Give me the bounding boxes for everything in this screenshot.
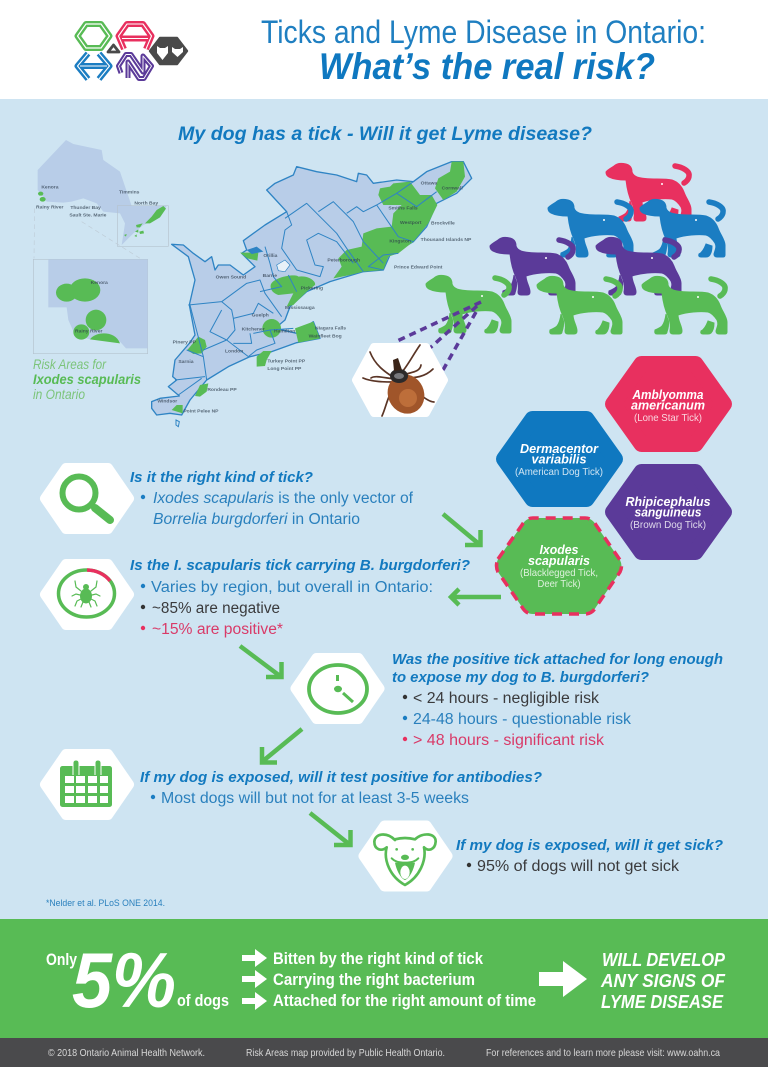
place names: Hamilton <box>274 328 295 334</box>
question text: Is it the right kind of tick? <box>130 470 313 486</box>
step 3: attachment time <box>296 652 723 749</box>
question text: Was the positive tick attached for long enough <box>392 652 723 668</box>
answer text: Ixodes scapularis is the only vector of <box>153 490 414 507</box>
place names: Guelph <box>252 312 269 318</box>
place names: Kitchener <box>242 326 265 332</box>
question text <box>392 652 723 686</box>
place names: Sarnia <box>178 359 194 365</box>
hexagon: Amblyomma americanum <box>613 364 724 444</box>
map: Ontario overview inset: Thunder Bay <box>70 205 101 211</box>
place names: Cornwall <box>442 185 463 191</box>
subheading: My dog has a tick - Will it get Lyme disease? <box>178 124 592 145</box>
question text: If my dog is exposed, will it test positive for antibodies? <box>140 770 542 786</box>
map caption: Ixodes scapularis <box>33 371 141 387</box>
icon: arrow <box>242 970 267 988</box>
flow arrows <box>240 514 501 845</box>
step 1: right kind of tick <box>45 468 414 529</box>
place names: London <box>225 348 243 354</box>
logo hexagon H <box>78 54 110 79</box>
map: northwestern detail inset <box>48 259 148 348</box>
logo: OAHN hexagons <box>78 24 187 79</box>
icon: magnifying glass <box>45 468 129 529</box>
logo hexagon A <box>118 24 152 49</box>
place names: Smiths Falls <box>388 205 418 211</box>
place names: Mississauga <box>285 305 315 311</box>
hexagon: Dermacentor variabilis <box>504 419 615 499</box>
outcome text: WILL DEVELOP <box>602 950 726 970</box>
map credit: Risk Areas map provided by Public Health Ontario. <box>246 1047 445 1059</box>
place names: Windsor <box>157 398 177 404</box>
logo hexagon N <box>118 54 152 78</box>
hexagon: Amblyomma americanum: americanum <box>631 398 705 412</box>
place names: Wainfleet Bog <box>309 334 342 340</box>
hexagon: Amblyomma americanum: (Lone Star Tick) <box>634 412 702 424</box>
place names: Turkey Point PP <box>267 358 306 364</box>
title line 2: What’s the real risk? <box>319 46 655 87</box>
Only 5% of dogs: 5% <box>72 936 176 1024</box>
logo hexagon animals <box>150 38 187 64</box>
arrow: Ixodes to step 2 <box>451 589 501 605</box>
county borders <box>175 182 437 395</box>
icon: calendar <box>45 754 129 815</box>
footnote: *Nelder et al. PLoS ONE 2014. <box>46 898 165 908</box>
answer text: Most dogs will but not for at least 3-5 weeks <box>161 790 469 807</box>
map: Ontario overview inset: Kenora <box>41 184 59 190</box>
header band <box>0 0 768 99</box>
answer list <box>141 579 433 638</box>
answer list <box>403 690 631 749</box>
red dog <box>606 163 691 221</box>
hexagon: Rhipicephalus sanguineus: Rhipicephalus <box>626 494 710 509</box>
purple dog right <box>596 237 681 295</box>
question text: If my dog is exposed, will it get sick? <box>456 838 723 854</box>
hexagon: Ixodes scapularis: Deer Tick) <box>538 578 580 590</box>
answer text: 95% of dogs will not get sick <box>477 858 679 875</box>
tick illustration <box>363 345 434 420</box>
outcome text: ANY SIGNS OF <box>600 971 726 991</box>
blue dog right <box>640 199 725 257</box>
answer text <box>141 490 414 528</box>
place names: Kingston <box>389 238 411 244</box>
arrow: step 2 to step 3 <box>240 646 282 677</box>
arrow: step 3 to step 4 <box>262 729 302 762</box>
place names: Peterborough <box>327 258 360 264</box>
icon: arrow <box>242 992 267 1010</box>
map caption: in Ontario <box>33 386 85 402</box>
place names <box>157 180 472 414</box>
place names: Barrie <box>263 273 277 279</box>
map: Ontario overview inset: North Bay <box>134 200 158 206</box>
Only 5% of dogs: Only <box>46 950 77 969</box>
title line 1: Ticks and Lyme Disease in Ontario: <box>261 14 706 50</box>
arrow: step 1 to Ixodes <box>443 514 480 545</box>
icon: clock <box>296 658 380 719</box>
hexagon: Dermacentor variabilis: Dermacentor <box>520 441 599 456</box>
answer list: Varies by region, but overall in Ontario: <box>151 579 433 596</box>
place names: Orillia <box>263 253 278 259</box>
map: Ontario overview inset: Timmins <box>119 189 140 195</box>
question text: Is the I. scapularis tick carrying B. burgdorferi? <box>130 558 470 574</box>
hexagon: Ixodes scapularis: scapularis <box>528 553 590 568</box>
purple dog left <box>490 237 575 295</box>
place names: Brockville <box>431 221 455 227</box>
website: For references and to learn more please visit: www.oahn.ca <box>486 1047 720 1059</box>
place names: Westport <box>400 220 422 226</box>
three conditions with arrows: Bitten by the right kind of tick <box>273 949 483 968</box>
map caption <box>33 356 141 402</box>
risk areas <box>172 162 465 413</box>
outcome text <box>600 950 726 1012</box>
dashed lines from tick to dog <box>395 302 481 370</box>
answer list: 24-48 hours - questionable risk <box>413 711 631 728</box>
icon: happy dog face <box>364 826 448 886</box>
icon: tick in ring <box>45 564 129 625</box>
Only 5% of dogs: of dogs <box>177 991 229 1010</box>
lakes <box>277 260 290 272</box>
map: Ontario overview inset <box>33 140 168 354</box>
answer list: ~85% are negative <box>152 600 280 617</box>
three conditions with arrows: Attached for the right amount of time <box>273 991 536 1010</box>
hexagon: Rhipicephalus sanguineus: (Brown Dog Tick) <box>630 519 706 531</box>
hexagon: Dermacentor variabilis: (American Dog Tick) <box>515 466 603 478</box>
logo hexagon O <box>78 24 110 48</box>
hexagon: Ixodes scapularis: Ixodes <box>540 542 578 557</box>
green summary band <box>0 919 768 1038</box>
hexagon: Rhipicephalus sanguineus <box>613 472 724 552</box>
hexagon: Ixodes scapularis <box>496 518 622 614</box>
place names: Prince Edward Point <box>394 265 443 271</box>
Only 5% of dogs <box>46 936 229 1024</box>
blue dog left <box>548 199 633 257</box>
hexagon: Dermacentor variabilis: variabilis <box>532 452 586 466</box>
hexagon: Amblyomma americanum: Amblyomma <box>632 387 704 402</box>
hexagon: Ixodes scapularis: (Blacklegged Tick, <box>520 567 598 579</box>
icon: large arrow <box>539 961 587 997</box>
arrow: step 4 to step 5 <box>310 813 350 845</box>
outcome text: LYME DISEASE <box>601 992 724 1012</box>
footer bar <box>0 1038 768 1067</box>
map: Ontario overview inset: Sault Ste. Marie <box>69 212 107 218</box>
answer list: < 24 hours - negligible risk <box>413 690 599 707</box>
map: northwestern detail inset: Kenora <box>91 280 108 286</box>
place names: Thousand Islands NP <box>421 237 472 243</box>
map: northwestern detail inset: Rainy River <box>75 329 102 335</box>
tick species hexagons <box>496 364 724 614</box>
place names: Owen Sound <box>216 274 246 280</box>
place names: Niagara Falls <box>315 325 346 331</box>
logo triangle <box>108 45 119 52</box>
place names: Ottawa <box>421 180 438 186</box>
question text: to expose my dog to B. burgdorferi? <box>392 670 649 686</box>
dogs group: one red, two blue, two purple, three green <box>426 163 727 334</box>
answer list: > 48 hours - significant risk <box>413 732 604 749</box>
step 2: tick carrying bacterium <box>45 558 470 638</box>
place names: Pinery PP <box>173 339 197 345</box>
place names: Long Point PP <box>267 366 302 372</box>
three conditions with arrows: Carrying the right bacterium <box>273 970 475 989</box>
icon: arrow <box>242 949 267 967</box>
map: southern Ontario risk areas <box>152 162 472 427</box>
three conditions with arrows <box>242 949 536 1010</box>
answer text: Borrelia burgdorferi in Ontario <box>153 511 360 528</box>
copyright: © 2018 Ontario Animal Health Network. <box>48 1047 205 1059</box>
place names: Pickering <box>301 286 323 292</box>
step 4: antibodies <box>45 754 542 815</box>
place names: Point Pelee NP <box>183 408 219 414</box>
green dog left <box>426 275 511 333</box>
place names: Rondeau PP <box>207 387 237 393</box>
step 5: will it get sick <box>364 826 723 886</box>
tick photo hexagon <box>356 345 444 420</box>
green dog middle <box>537 276 622 334</box>
answer list: ~15% are positive* <box>152 621 283 638</box>
map: Ontario overview inset: Rainy River <box>36 205 63 211</box>
map caption: Risk Areas for <box>33 356 107 372</box>
green dog right <box>642 276 727 334</box>
hexagon: Rhipicephalus sanguineus: sanguineus <box>634 504 702 520</box>
